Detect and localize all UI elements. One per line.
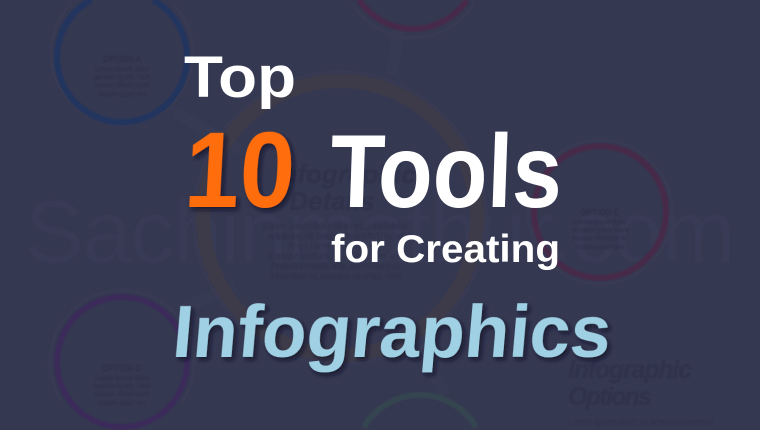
background text: infographic details: Infographic: [274, 159, 416, 189]
option A circle: Nullam quam leo: [98, 91, 147, 98]
background text: infographic options: Options: [568, 383, 652, 411]
heading: 10: 10: [182, 109, 298, 230]
option A circle: cursus. Morbi ut mi: [95, 82, 149, 89]
background text: infographic options: Infographic: [568, 356, 692, 384]
option D circle: [50, 290, 194, 427]
option D circle: Lorem ipsum dolor: [95, 375, 150, 382]
background text: infographic details: bibendum at, posuere sit amet, nibh: [271, 271, 401, 282]
background text: infographic details: Lorem ipsum dolor sit amet, consectetur: [263, 221, 408, 232]
option C circle: Nullam quam leo: [576, 244, 625, 251]
background text: infographic details: [263, 159, 416, 282]
option C circle: Lorem ipsum dolor: [573, 219, 628, 226]
option A circle: OPTION A: [103, 55, 142, 64]
heading: Infographics: Infographics: [170, 290, 615, 373]
central circle: [194, 72, 486, 364]
background text: infographic details: Condimentum, pulvinar dui vel: [268, 251, 403, 262]
option A circle: adipiscing elit. Nam: [94, 74, 150, 81]
option D circle: OPTION D: [103, 364, 142, 373]
background text: infographic details: Nullam nibh: [288, 241, 363, 252]
watermark: Sachinmathur.com: [25, 182, 735, 281]
option C circle: adipiscing elit. Nam: [572, 227, 628, 234]
background text: infographic details: adipiscing elit. Suspendisse Morbi lacus: [268, 231, 403, 242]
background text: infographic details: Details: [289, 186, 375, 216]
background text: infographic options: Lorem ipsum dolor sit amet consectetur: [568, 417, 714, 427]
option C circle: [528, 140, 672, 284]
bottom option circle: [364, 395, 476, 427]
option C circle: OPTION C: [581, 208, 620, 217]
option C circle: cursus. Morbi ut mi: [573, 235, 627, 242]
heading: for Creating: for Creating: [331, 228, 560, 271]
heading: Tools: Tools: [328, 114, 564, 230]
option D circle: Nullam quam leo: [98, 400, 147, 407]
background text: infographic details: Praesent mauris ante, elementum et,: [271, 261, 401, 272]
option D circle: adipiscing elit. Nam: [94, 383, 150, 390]
option D circle: cursus. Morbi ut mi: [95, 391, 149, 398]
heading: Top: Top: [184, 45, 296, 110]
option A circle: [51, 0, 193, 124]
connector lines: [175, 30, 445, 395]
option A circle: Lorem ipsum dolor: [95, 66, 150, 73]
top option circle: [352, 0, 474, 38]
background text: infographic options: [568, 356, 714, 427]
